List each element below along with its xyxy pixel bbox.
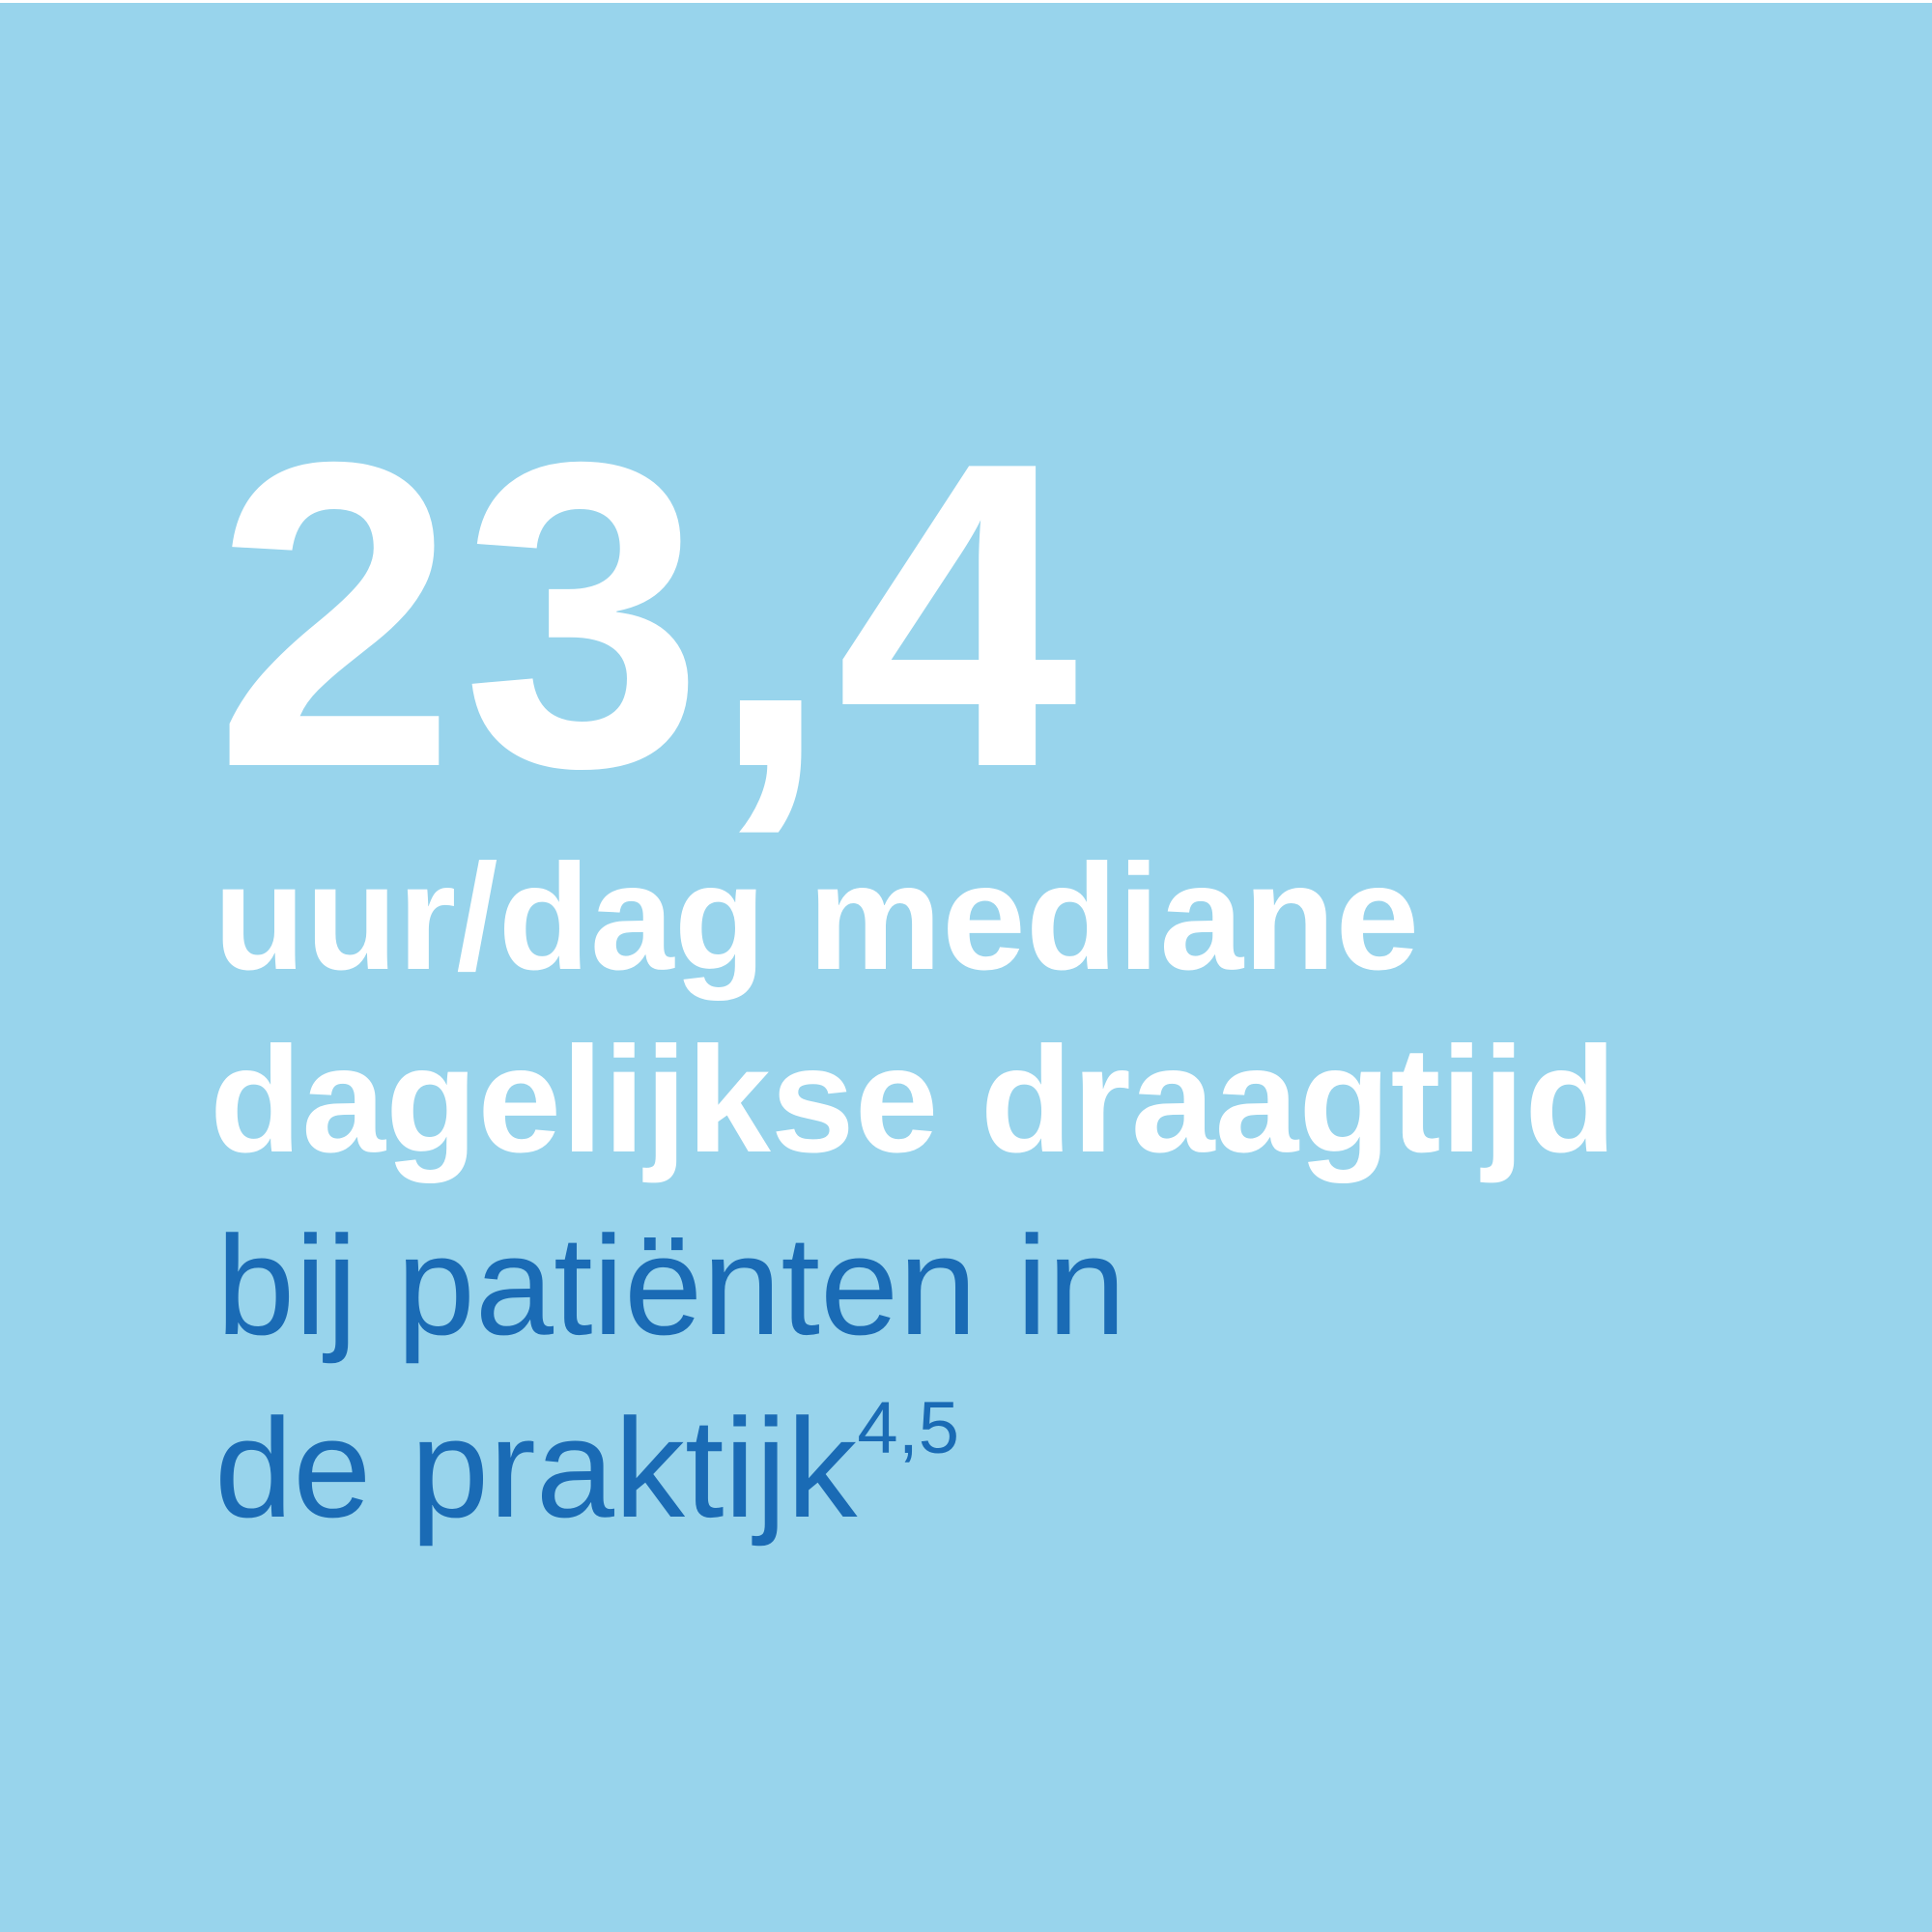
heading line 2: dagelijkse draagtijd [210,1016,1616,1184]
subtext line 2: de praktijk4,5 [214,1387,959,1547]
big number: 23,4 [214,373,1084,858]
heading line 1: uur/dag mediane [213,834,1419,1002]
subtext line 1: bij patiënten in [216,1207,1126,1364]
